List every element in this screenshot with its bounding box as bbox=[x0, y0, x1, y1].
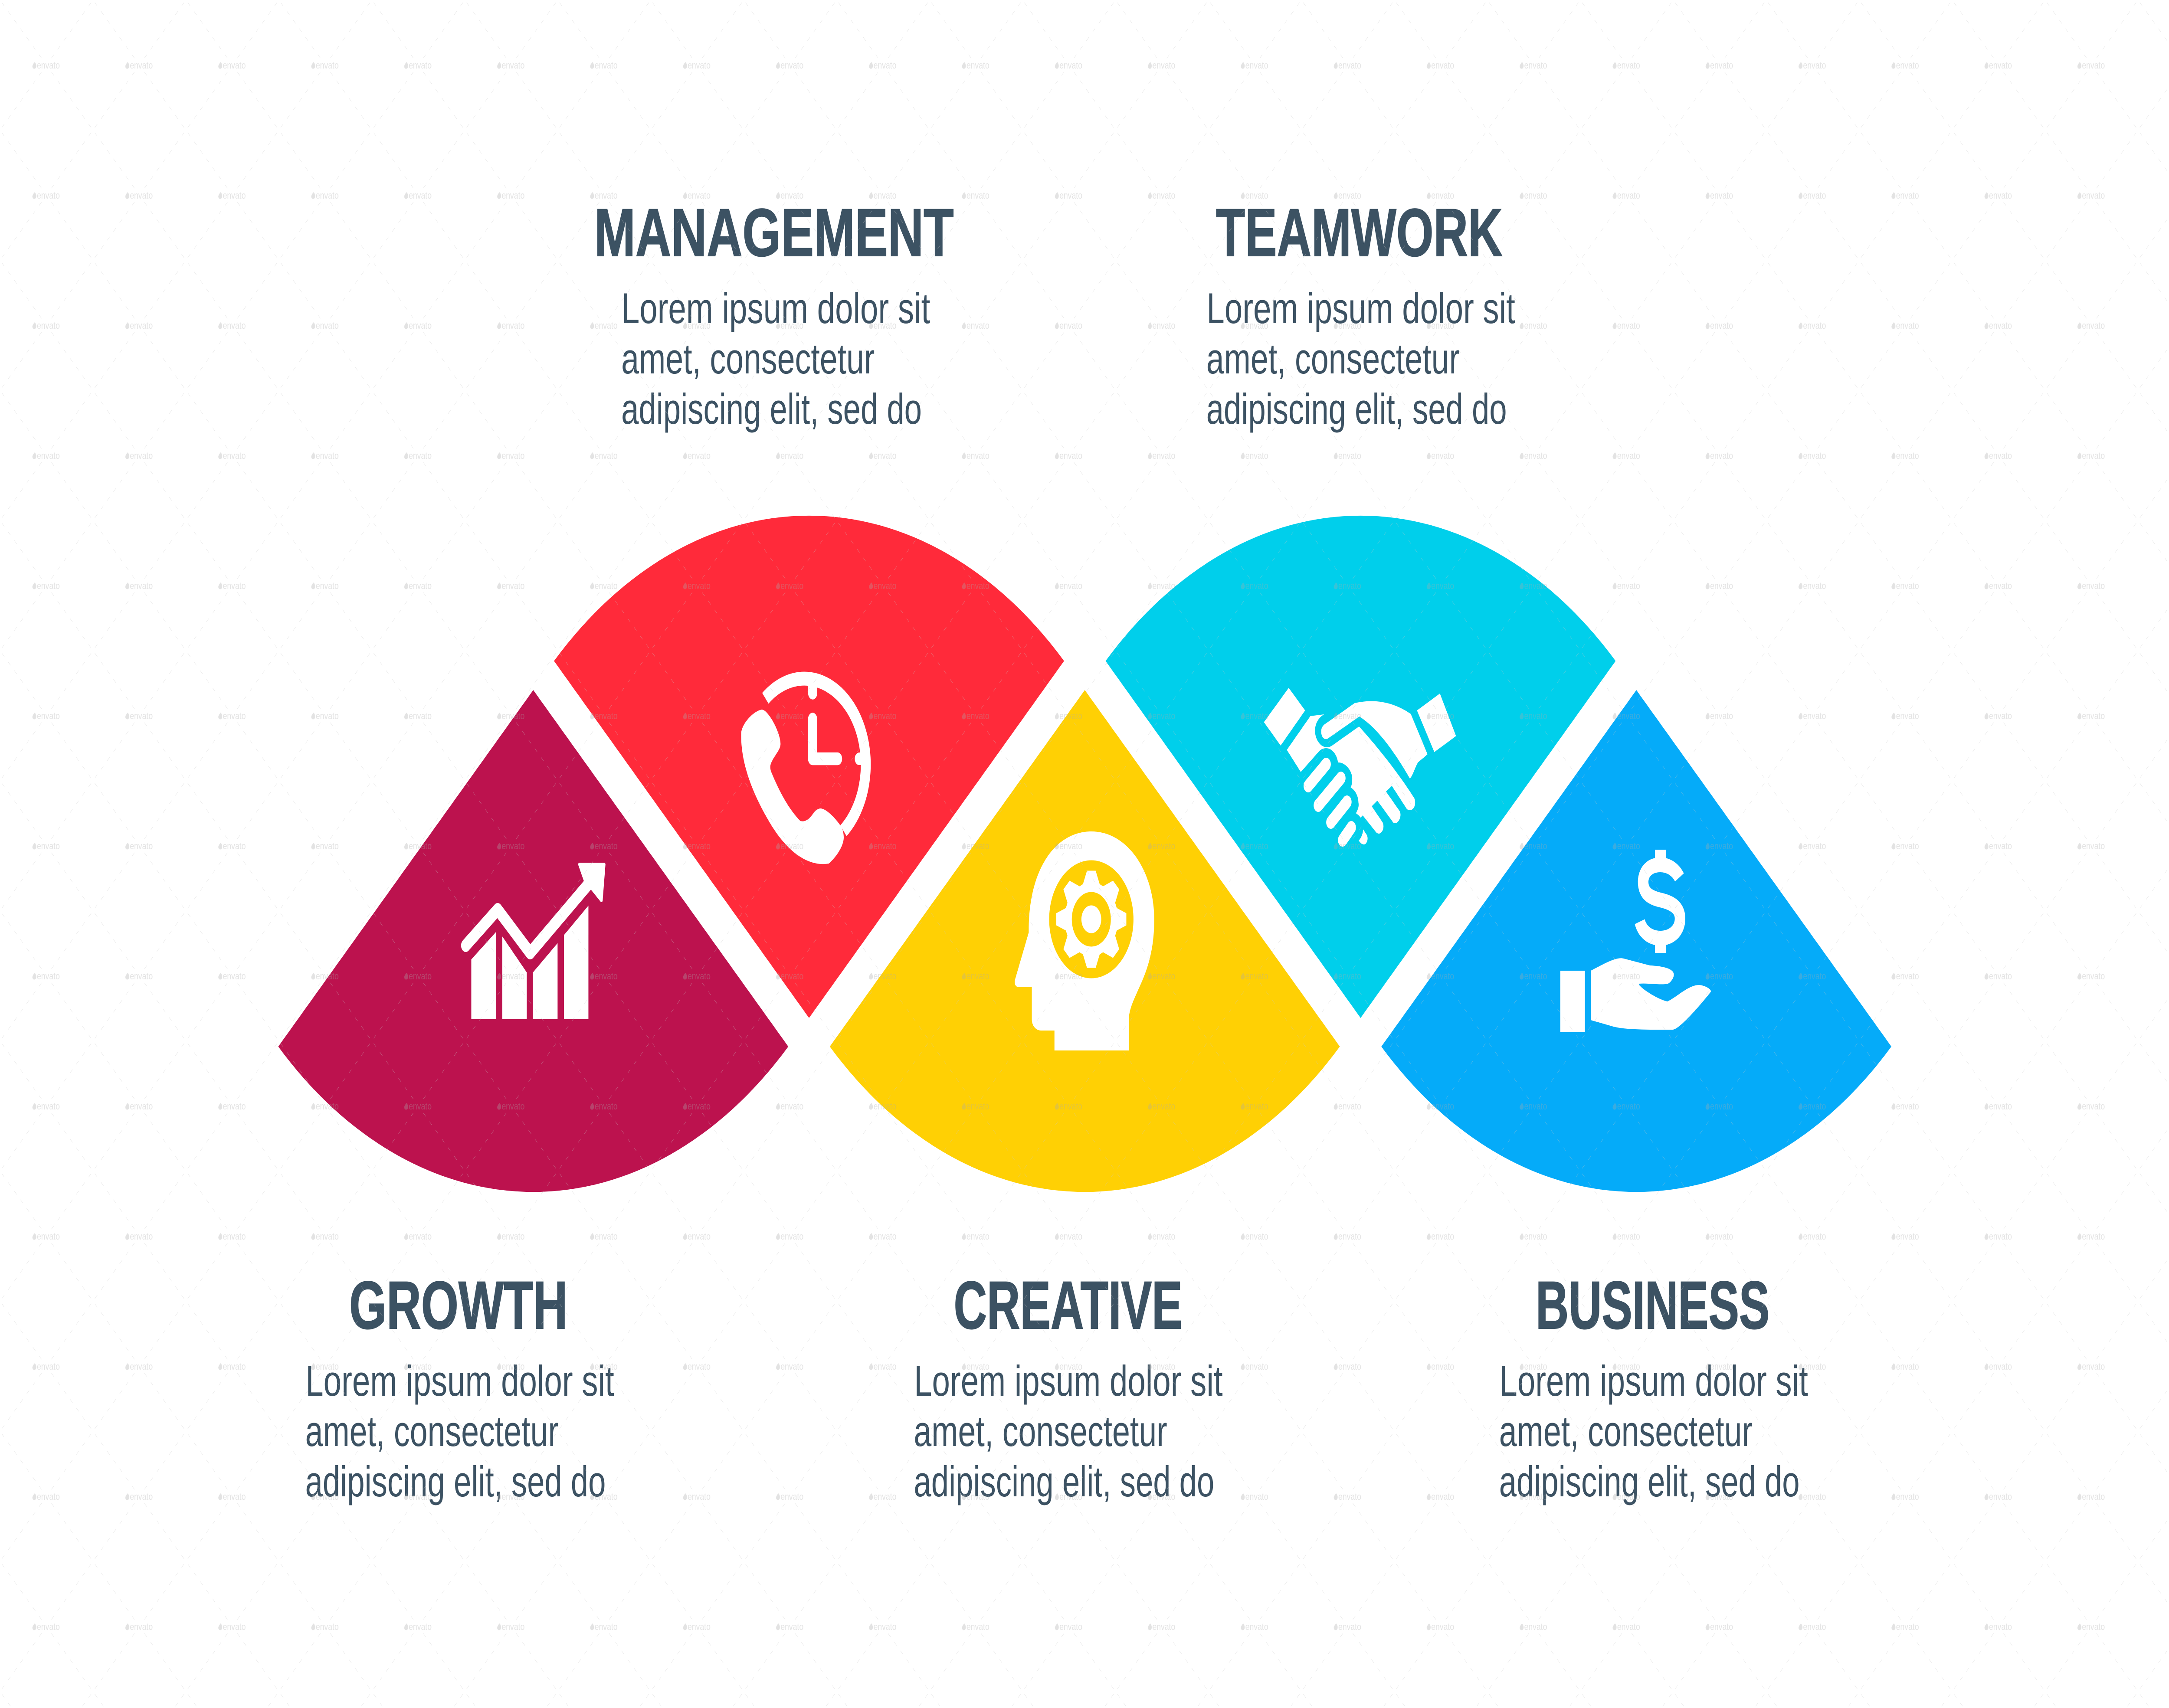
text block: business bbox=[1499, 1357, 1808, 1506]
text block: management: Lorem ipsum dolor sit bbox=[622, 285, 930, 333]
text block: growth: adipiscing elit, sed do bbox=[305, 1458, 606, 1506]
heading: teamwork: TEAMWORK bbox=[1216, 194, 1503, 270]
teamwork sector bbox=[1106, 516, 1615, 1018]
text block: business: amet, consectetur bbox=[1499, 1407, 1753, 1456]
text block: management bbox=[621, 285, 930, 433]
icon: phone and clock bbox=[741, 677, 868, 864]
business sector bbox=[1381, 690, 1891, 1192]
text block: creative: adipiscing elit, sed do bbox=[914, 1458, 1214, 1506]
text block: teamwork bbox=[1206, 285, 1515, 433]
text block: growth: amet, consectetur bbox=[305, 1407, 559, 1456]
panel: management bbox=[554, 516, 1064, 1018]
text block: management: adipiscing elit, sed do bbox=[621, 385, 922, 433]
heading: management: MANAGEMENT bbox=[594, 194, 954, 270]
text block: teamwork: adipiscing elit, sed do bbox=[1206, 385, 1507, 433]
text block: management: amet, consectetur bbox=[621, 335, 875, 383]
panel: teamwork bbox=[1106, 516, 1615, 1018]
heading: creative: CREATIVE bbox=[954, 1267, 1183, 1343]
text block: growth: Lorem ipsum dolor sit bbox=[305, 1357, 614, 1405]
text block: business: Lorem ipsum dolor sit bbox=[1499, 1357, 1808, 1405]
icon: rising bar chart with arrow bbox=[466, 864, 604, 1019]
icon: head with gear bbox=[1015, 831, 1154, 1050]
panel: business bbox=[1381, 690, 1891, 1192]
growth sector bbox=[278, 690, 788, 1192]
creative sector bbox=[830, 690, 1340, 1192]
text block: teamwork: amet, consectetur bbox=[1206, 335, 1460, 383]
icon: hand holding dollar bbox=[1560, 850, 1711, 1032]
heading: growth: GROWTH bbox=[349, 1267, 568, 1343]
management sector bbox=[554, 516, 1064, 1018]
text block: business: adipiscing elit, sed do bbox=[1499, 1458, 1800, 1506]
icon: handshake bbox=[1264, 688, 1456, 844]
text block: creative: Lorem ipsum dolor sit bbox=[914, 1357, 1223, 1405]
text block: teamwork: Lorem ipsum dolor sit bbox=[1206, 285, 1515, 333]
heading: business: BUSINESS bbox=[1536, 1267, 1769, 1343]
text block: creative: amet, consectetur bbox=[914, 1407, 1167, 1456]
text block: creative bbox=[914, 1357, 1223, 1506]
text block: growth bbox=[305, 1357, 614, 1506]
panel: growth bbox=[278, 690, 788, 1192]
panel: creative bbox=[830, 690, 1340, 1192]
